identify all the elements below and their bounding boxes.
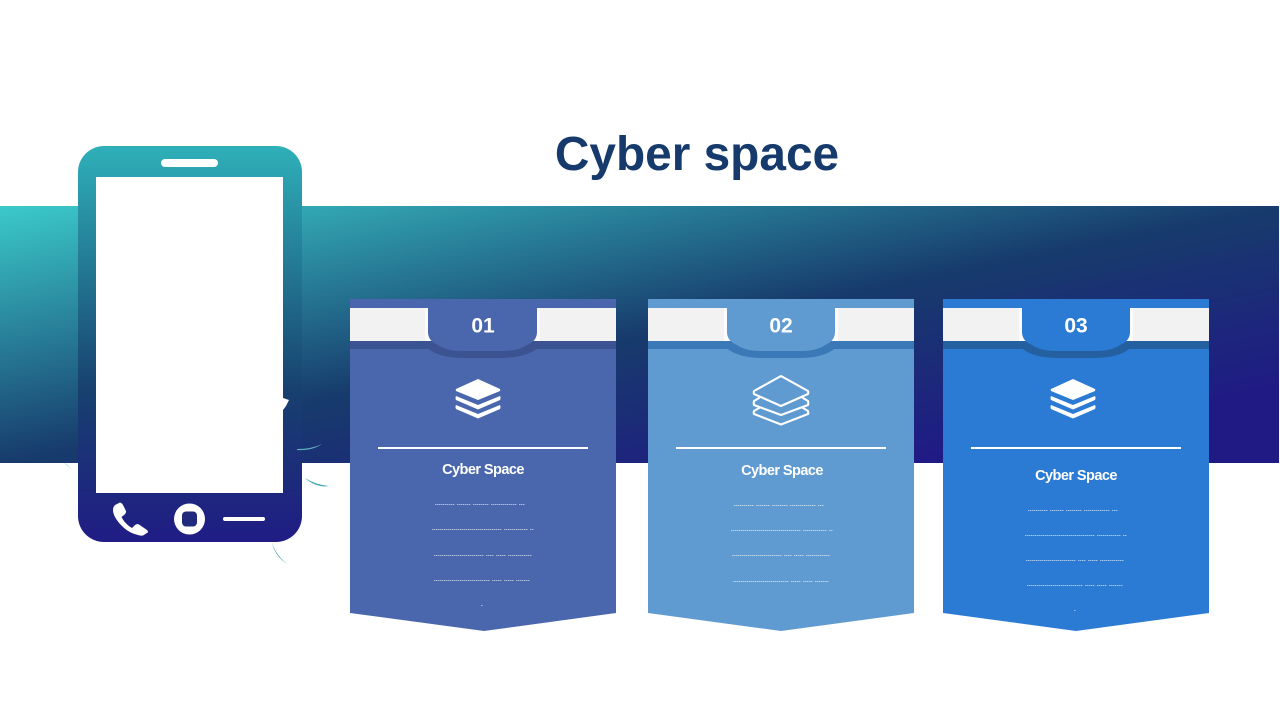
- panel: card 03: [943, 299, 1209, 631]
- background band: [0, 206, 1279, 463]
- card 03 body text: ................................... ............ ..: [1025, 532, 1127, 538]
- phone speaker: [161, 159, 218, 167]
- icon: outline layers: [754, 376, 808, 424]
- title: Cyber space: [555, 128, 839, 181]
- card 03 body text: ............................ ..... ..... .......: [1027, 582, 1123, 588]
- card 01 body text: .......... ....... ........ ............. ...: [435, 501, 525, 507]
- card 02 heading: Cyber Space: [741, 463, 823, 479]
- card 03 body text: ......................... .... ..... ............: [1026, 557, 1124, 563]
- card 01 header strip: [350, 308, 616, 358]
- card 02 number: 02: [769, 314, 793, 338]
- icon: handset: [113, 502, 148, 536]
- card 01 heading: Cyber Space: [442, 462, 524, 478]
- card 02 body text: ......................... .... ..... ............: [732, 552, 830, 558]
- card 02 body text: ............................ ..... ..... .......: [733, 578, 829, 584]
- card 02 body text: ................................... ............ ..: [731, 527, 833, 533]
- card 01 body text: ............................ ..... ..... .......: [434, 577, 530, 583]
- phone screen: [96, 177, 283, 493]
- card 01 divider: [378, 447, 588, 449]
- icon: solid layers: [456, 379, 500, 418]
- card 02 body: [648, 299, 914, 631]
- smartphone: [78, 146, 302, 542]
- card 01 body text: .: [481, 602, 483, 608]
- card 03 header strip: [943, 308, 1209, 358]
- decorative leaf marks around phone: [64, 398, 329, 564]
- card 02 body text: [731, 502, 833, 584]
- phone body: [78, 146, 302, 542]
- card 01 body: [350, 299, 616, 631]
- card 03 divider: [971, 447, 1181, 449]
- card 01 number: 01: [471, 314, 495, 338]
- icon: home button: [174, 504, 205, 534]
- card 03 number: 03: [1064, 314, 1088, 338]
- card 02 body text: .......... ....... ........ ............. ...: [734, 502, 824, 508]
- card 03 body text: [1025, 507, 1127, 613]
- card 03 body text: .......... ....... ........ ............. ...: [1028, 507, 1118, 513]
- icon: solid layers: [1050, 379, 1096, 418]
- card 02 divider: [676, 447, 886, 449]
- card 01 body text: ......................... .... ..... ............: [434, 552, 532, 558]
- card 02 header strip: [648, 308, 914, 358]
- panel: card 01: [350, 299, 616, 631]
- card 03 body: [943, 299, 1209, 631]
- panel: card 02: [648, 299, 914, 631]
- card 01 body text: [432, 501, 534, 608]
- card 01 body text: ................................... ............ ..: [432, 526, 534, 532]
- card 03 heading: Cyber Space: [1035, 468, 1117, 484]
- icon: menu line: [223, 517, 265, 521]
- card 03 body text: .: [1074, 607, 1076, 613]
